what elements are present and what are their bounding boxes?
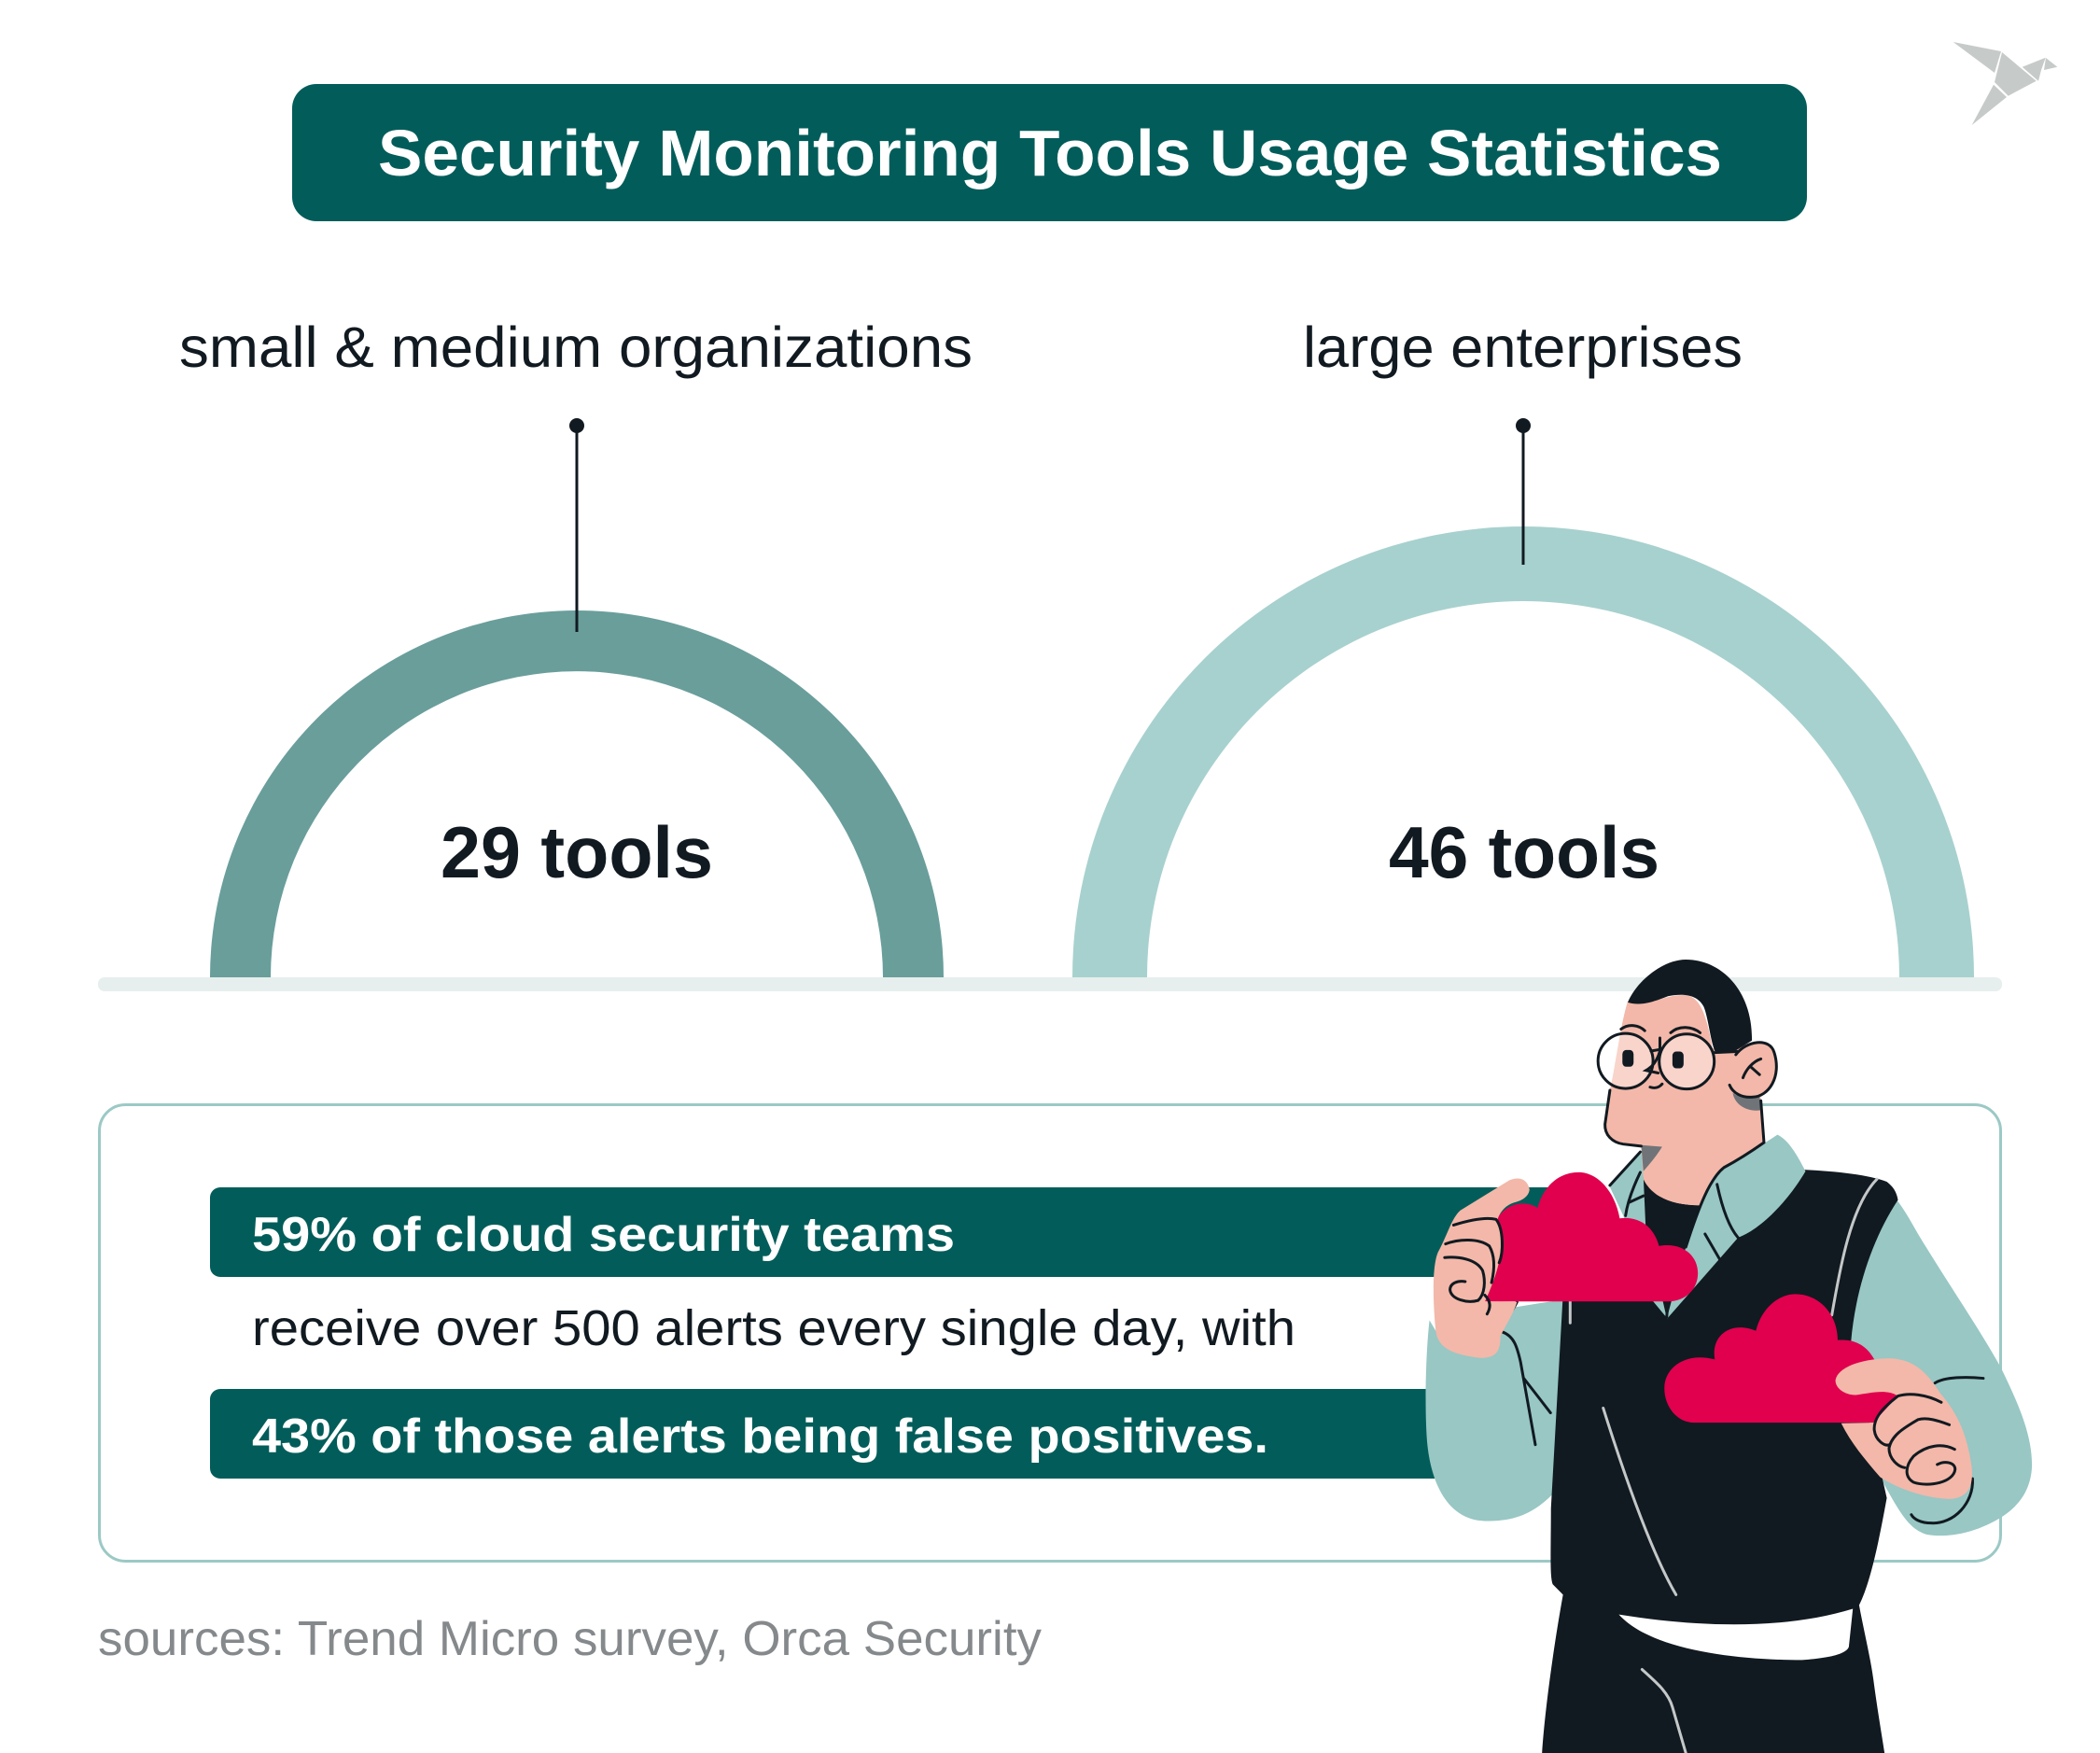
cloud right	[1664, 1294, 1898, 1423]
vest and trousers	[1542, 1170, 1898, 1753]
left sleeve	[1426, 1299, 1564, 1522]
illustration: man holding two clouds	[1426, 960, 2032, 1753]
hand right	[1836, 1358, 1972, 1499]
gauge: large enterprises	[1072, 418, 1974, 977]
gauge: small and medium organizations	[210, 418, 944, 977]
gauge: large enterprises: 46 tools	[1389, 811, 1659, 893]
panel: alert statistics	[99, 1105, 2001, 1561]
shirt left collar	[1610, 1152, 1668, 1319]
right sleeve	[1846, 1189, 2032, 1536]
title banner	[292, 84, 1807, 221]
highlight: false positives: 43% of those alerts being false positives.	[252, 1409, 1268, 1464]
label: large enterprises: large enterprises	[1303, 316, 1743, 379]
label: small and medium organizations: small & medium organizations	[179, 316, 973, 379]
black tee	[1644, 1176, 1701, 1318]
shirt right collar	[1667, 1135, 1805, 1319]
vest highlights	[1570, 1179, 1877, 1753]
highlight: cloud security teams: 59% of cloud security teams	[252, 1208, 955, 1262]
cloud left	[1485, 1172, 1698, 1301]
eyes	[1622, 1050, 1684, 1068]
text: alerts per day: receive over 500 alerts every single day, with	[252, 1300, 1295, 1356]
neck shadows	[1641, 1093, 1761, 1171]
sources note: sources: Trend Micro survey, Orca Security	[98, 1612, 1042, 1666]
finger line art	[1445, 1218, 1955, 1484]
gauge: small and medium organizations: 29 tools	[441, 811, 713, 893]
hair	[1628, 960, 1752, 1051]
icon: origami bird logo	[1953, 42, 2057, 125]
face line art	[1501, 1026, 1983, 1523]
shirt hem	[1618, 1609, 1853, 1660]
glasses	[1598, 1033, 1737, 1089]
hand left	[1434, 1178, 1530, 1358]
face and neck	[1605, 995, 1764, 1205]
ear	[1729, 1043, 1776, 1097]
title banner: Security Monitoring Tools Usage Statistics	[378, 117, 1722, 189]
highlight: false positives	[210, 1389, 1610, 1479]
baseline bar	[98, 977, 2002, 991]
highlight: cloud security teams	[210, 1187, 1610, 1277]
